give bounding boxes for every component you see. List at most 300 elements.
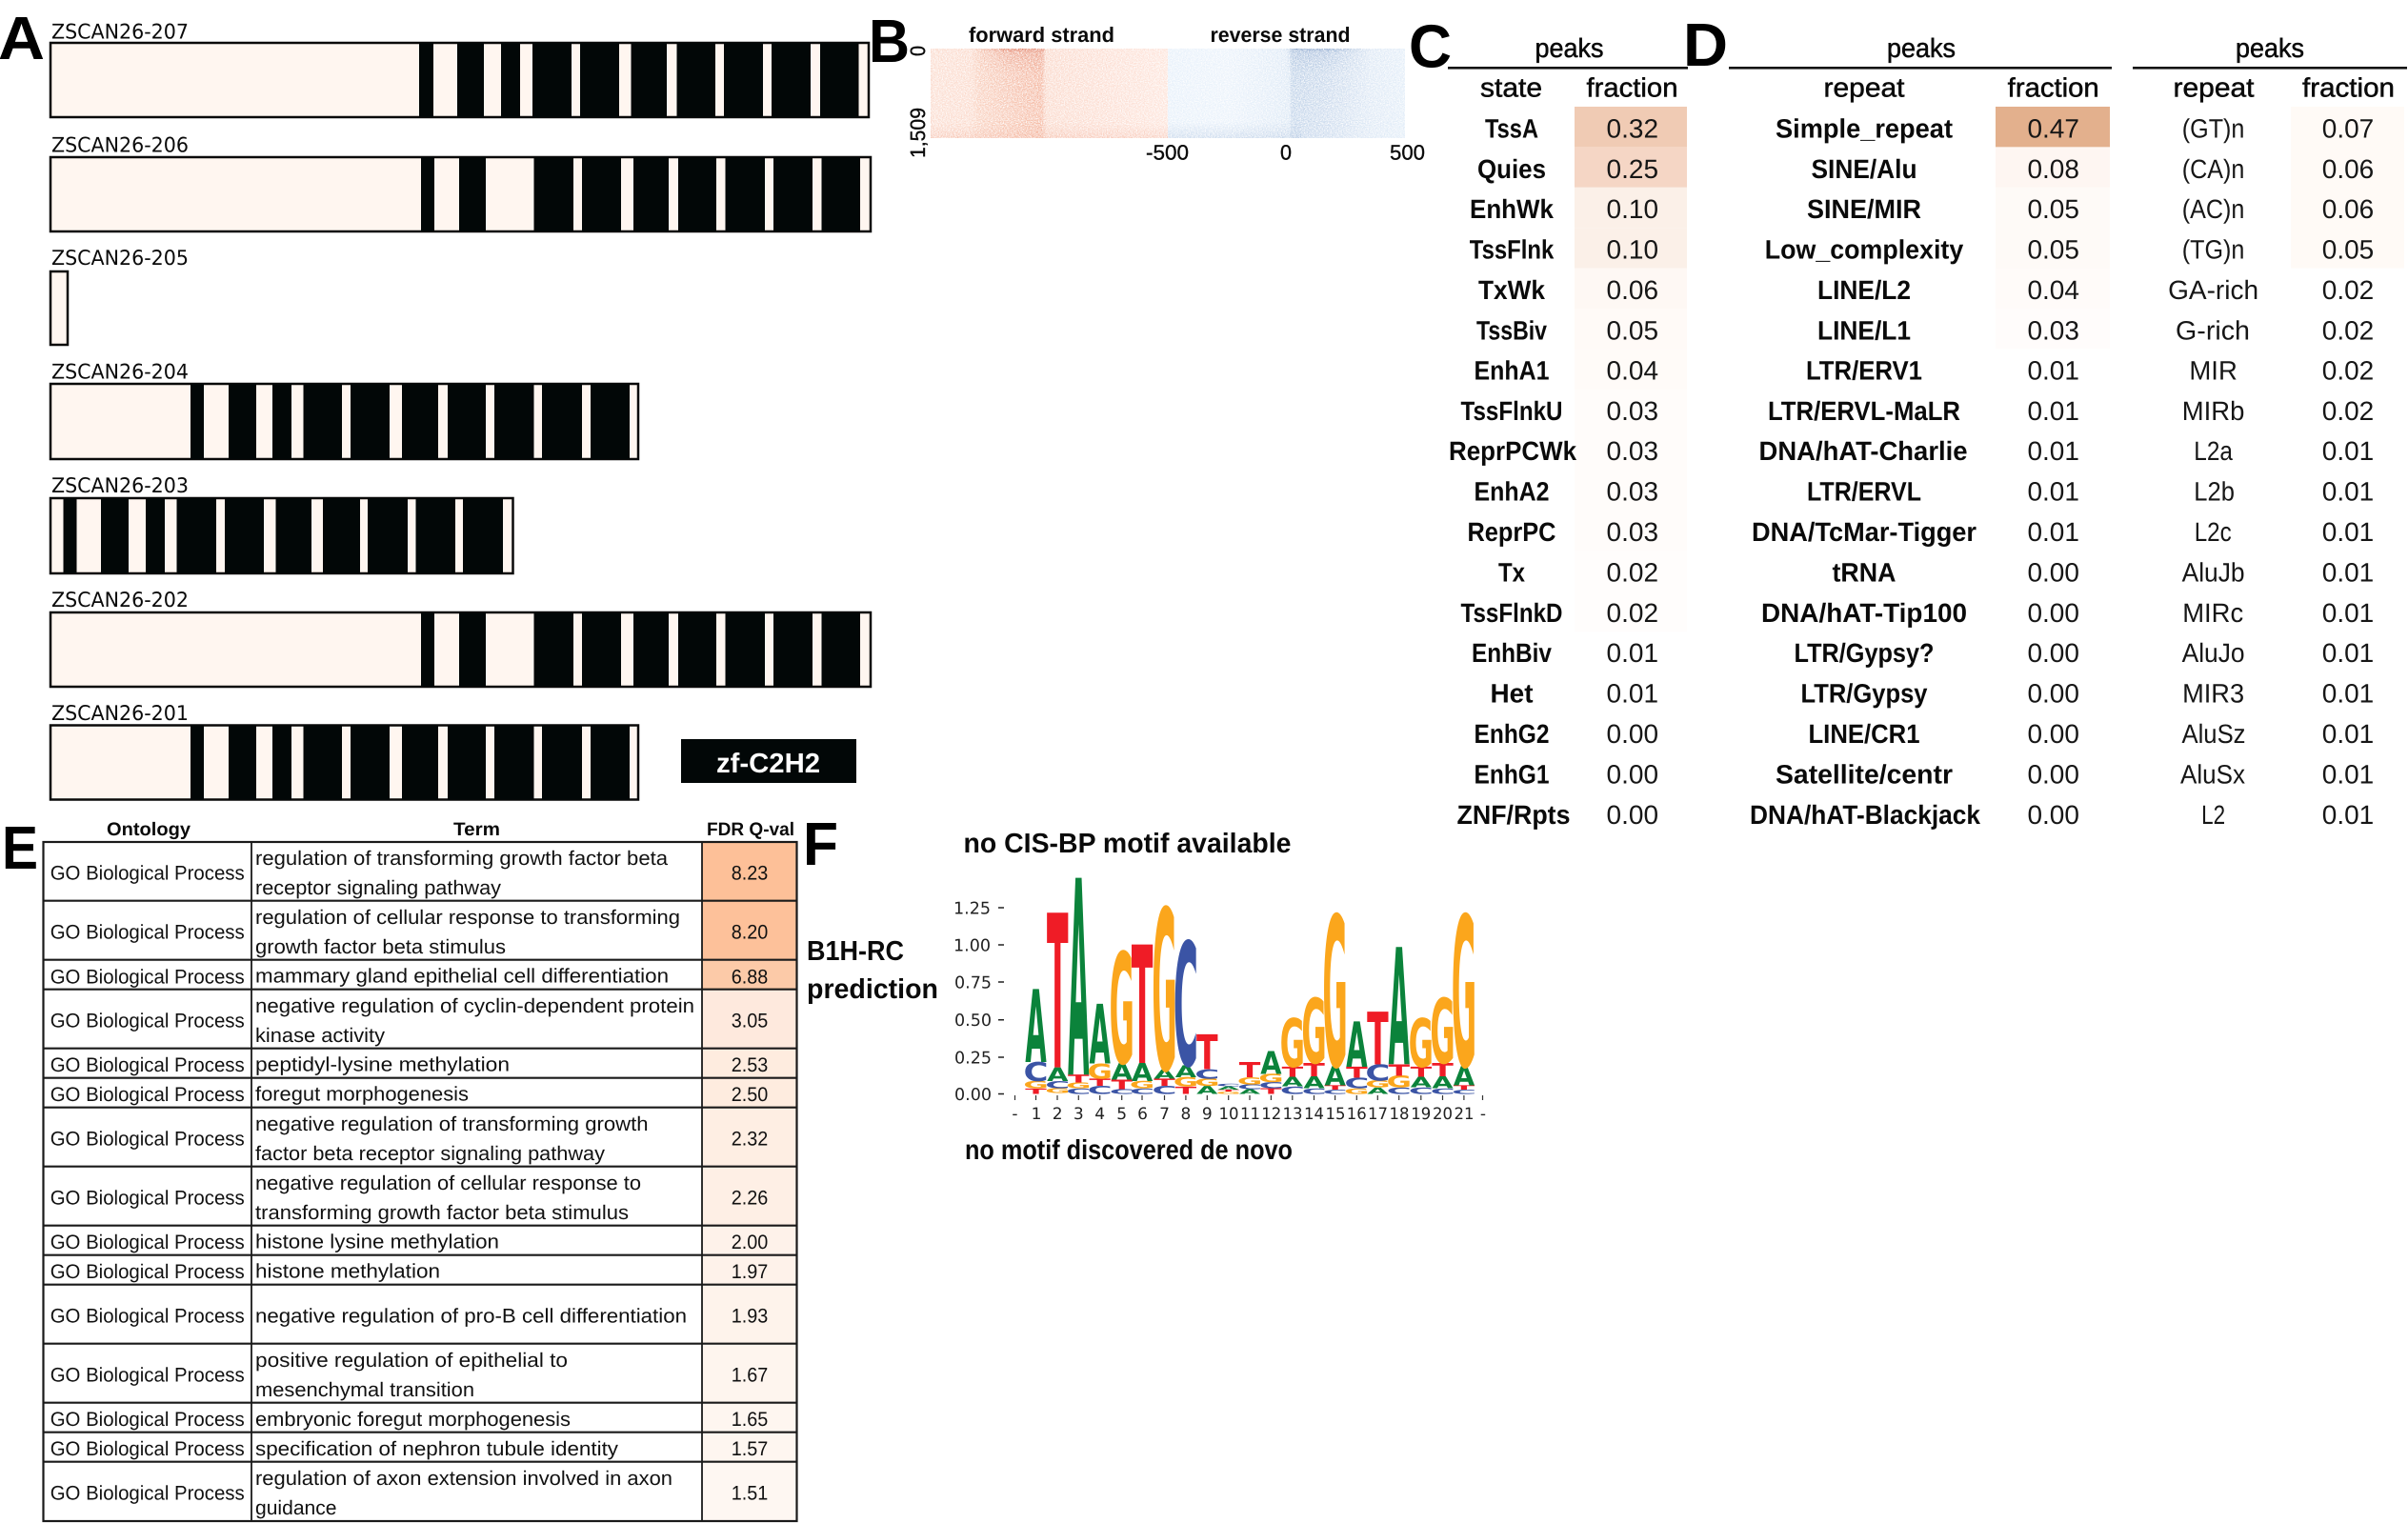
logo letter stacks: A [1025, 970, 1047, 1086]
logo letter stacks: T [1047, 872, 1069, 1118]
repeat class labels: LINE/L1 [1817, 315, 1911, 345]
panel letter E: E [2, 813, 38, 882]
logo letter stacks: A [1175, 1062, 1196, 1081]
panel C: chromatin state table [1409, 11, 1688, 830]
fraction values: repeat class: 0.00 [2027, 557, 2079, 587]
fraction values: repeat family: 0.06 [2322, 154, 2374, 184]
ontology column: GO Biological Process [50, 1409, 245, 1431]
repeat class labels: DNA/TcMar-Tigger [1752, 517, 1977, 547]
repeat class labels: tRNA [1833, 557, 1896, 587]
repeat class labels: LINE/L2 [1817, 275, 1911, 305]
repeat family labels: MIRb [2182, 396, 2244, 426]
fraction values: repeat family: 0.05 [2322, 235, 2374, 265]
ontology column: GO Biological Process [50, 1483, 245, 1505]
fraction values: 0.00 [1607, 759, 1658, 789]
repeat class labels: LTR/ERVL-MaLR [1768, 396, 1960, 426]
table header [107, 819, 794, 840]
isoform ZSCAN26-202 [50, 589, 871, 687]
fraction values: repeat family: 0.01 [2322, 436, 2374, 466]
repeat class labels: DNA/hAT-Blackjack [1750, 800, 1980, 830]
y axis labels: 1,509 [906, 108, 930, 158]
fraction values: repeat family: 0.02 [2322, 275, 2374, 305]
state labels: ZNF/Rpts [1457, 800, 1570, 830]
ontology column: GO Biological Process [50, 1232, 245, 1253]
logo x axis: 3 [1074, 1105, 1084, 1124]
fraction values: 0.06 [1607, 275, 1658, 305]
logo letter stacks: T [1432, 1059, 1454, 1081]
ontology column: GO Biological Process [50, 1054, 245, 1076]
logo letter stacks: G [1174, 1074, 1198, 1090]
logo letter stacks: A [1112, 1058, 1133, 1085]
isoform ZSCAN26-203 [50, 474, 512, 573]
table header: repeat class: repeat [1823, 72, 1905, 103]
logo letter stacks: T [1196, 1025, 1218, 1081]
fraction values: 0.01 [1607, 638, 1658, 668]
logo x axis: 13 [1282, 1105, 1303, 1124]
logo letter stacks: T [1154, 1076, 1175, 1089]
repeat family labels: AluSz [2181, 719, 2246, 749]
table header: Term [453, 819, 500, 840]
logo letter stacks: A [1068, 827, 1089, 1140]
fraction values: 0.03 [1607, 477, 1658, 507]
fraction values: repeat class: 0.01 [2027, 355, 2079, 385]
logo letter stacks: A [1090, 989, 1111, 1083]
repeat family labels: (GT)n [2182, 114, 2244, 143]
logo letter stacks: T [1239, 1058, 1260, 1082]
logo letter stacks: C [1323, 1089, 1348, 1095]
logo letter stacks: A [1454, 1061, 1475, 1092]
FDR Q-value column: 2.32 [732, 1129, 768, 1151]
repeat family labels: L2 [2201, 800, 2225, 830]
repeat family labels: AluJo [2182, 638, 2245, 668]
FDR Q-value column: 1.51 [732, 1483, 768, 1505]
term column [255, 848, 694, 1519]
logo letter stacks: T [1132, 913, 1153, 1102]
logo x axis: 5 [1116, 1105, 1127, 1124]
fraction values: repeat family: 0.01 [2322, 719, 2374, 749]
logo letter stacks: G [1066, 1081, 1091, 1091]
logo letter stacks: A [1154, 1067, 1175, 1081]
logo letter stacks: T [1324, 1084, 1346, 1092]
legend: zf-C2H2 domain [681, 739, 856, 783]
logo letter stacks: G [1194, 1076, 1219, 1089]
repeat family labels: GA-rich [2168, 275, 2258, 305]
ontology column: GO Biological Process [50, 966, 245, 989]
table header: FDR Q-val [707, 819, 794, 840]
repeat class labels: LTR/Gypsy [1800, 679, 1928, 709]
fraction values: 0.25 [1607, 154, 1658, 184]
term column: negative regulation of cellular response to [255, 1172, 641, 1194]
fraction heat cells: repeat family [2291, 107, 2404, 269]
repeat family labels: MIRc [2182, 598, 2243, 628]
logo letter stacks: T [1303, 1059, 1325, 1081]
logo letter stacks: G [1280, 1006, 1305, 1083]
repeat class labels: LINE/CR1 [1808, 719, 1920, 749]
term column: histone lysine methylation [255, 1231, 499, 1253]
state labels: ReprPC [1467, 517, 1556, 547]
fraction values: repeat family: 0.01 [2322, 477, 2374, 507]
logo y axis: 0.00 [954, 1086, 992, 1105]
term column: growth factor beta stimulus [255, 936, 506, 958]
panel F: motif logo and notes [803, 810, 1486, 1166]
state labels: EnhA1 [1475, 355, 1549, 385]
fraction values: 0.03 [1607, 436, 1658, 466]
heatmap: reverse strand in blue [1168, 49, 1405, 138]
repeat class table [1729, 33, 2112, 830]
fraction values: repeat class: 0.00 [2027, 719, 2079, 749]
repeat class labels: DNA/hAT-Charlie [1758, 436, 1968, 466]
heatmap: forward strand in red [931, 49, 1168, 138]
fraction values: repeat family: 0.01 [2322, 759, 2374, 789]
y axis labels [906, 46, 930, 158]
fraction values: 0.01 [1607, 679, 1658, 709]
logo letter stacks: C [1409, 1086, 1434, 1096]
logo x axis: 12 [1261, 1105, 1281, 1124]
logo letter stacks: A [1346, 1010, 1368, 1082]
panel E: GO enrichment table [2, 813, 797, 1521]
FDR Q-value column: 2.53 [732, 1054, 768, 1076]
repeat class labels: LTR/ERV1 [1806, 355, 1922, 385]
fraction values: 0.05 [1607, 315, 1658, 345]
isoform ZSCAN26-206 [50, 133, 871, 231]
isoform ZSCAN26-206: ZSCAN26-206 [51, 133, 189, 158]
repeat family labels: (CA)n [2182, 154, 2244, 184]
ontology column: GO Biological Process [50, 1129, 245, 1151]
x axis labels: 500 [1390, 141, 1425, 164]
isoform ZSCAN26-207 [50, 21, 869, 117]
fraction values: repeat family: 0.01 [2322, 800, 2374, 830]
FDR Q-value column: 3.05 [732, 1011, 768, 1032]
table header: repeat class: fraction [2008, 72, 2099, 103]
FDR Q-value column: 2.50 [732, 1084, 768, 1106]
heading: forward strand: forward strand [969, 23, 1114, 47]
logo letter stacks: T [1367, 998, 1389, 1082]
fraction values: 0.04 [1607, 355, 1658, 385]
logo letter stacks: G [1110, 923, 1134, 1099]
logo letter stacks: G [1087, 1060, 1113, 1083]
logo letter stacks: T [1260, 1087, 1282, 1095]
fraction values: repeat class: 0.00 [2027, 759, 2079, 789]
repeat family labels: AluJb [2182, 557, 2245, 587]
table header: Ontology [107, 819, 191, 840]
logo letter stacks: A [1196, 1084, 1217, 1096]
panel letter D: D [1683, 10, 1728, 79]
FDR Q-value column: 8.23 [732, 863, 768, 885]
logo letter stacks: T [1411, 1064, 1432, 1080]
term column: regulation of transforming growth factor beta [255, 848, 668, 870]
repeat family labels: L2c [2195, 517, 2232, 547]
repeat class labels: DNA/hAT-Tip100 [1761, 598, 1967, 628]
fraction values: repeat class: 0.01 [2027, 477, 2079, 507]
FDR Q-value column: 2.26 [732, 1188, 768, 1210]
fraction heat cells [1575, 107, 1687, 631]
logo x axis: 20 [1433, 1105, 1453, 1124]
logo letter stacks: C [1237, 1083, 1262, 1091]
logo letter stacks: A [1367, 1086, 1389, 1096]
state labels: ReprPCWk [1449, 436, 1576, 466]
logo x axis [1012, 1095, 1486, 1124]
logo letter stacks: C [1258, 1080, 1283, 1090]
logo letter stacks: C [1280, 1085, 1305, 1096]
isoform ZSCAN26-204 [50, 360, 638, 459]
state labels: TxWk [1478, 275, 1545, 305]
heading: reverse strand: reverse strand [1210, 23, 1351, 47]
fraction heat cells: repeat class [1996, 107, 2110, 349]
logo x axis: 17 [1368, 1105, 1388, 1124]
note: no motif discovered de novo: no motif discovered de novo [965, 1135, 1293, 1166]
logo letter stacks: G [1045, 1087, 1070, 1094]
logo letter stacks: C [1387, 1086, 1412, 1096]
fraction values: repeat class [2027, 114, 2079, 830]
logo letter stacks: C [1045, 1079, 1070, 1091]
repeat class labels [1750, 114, 1980, 830]
term column: peptidyl-lysine methylation [255, 1053, 510, 1076]
fraction values: repeat class: 0.00 [2027, 800, 2079, 830]
state labels: Het [1490, 679, 1534, 709]
repeat class labels: Satellite/centr [1776, 759, 1953, 789]
logo letter stacks: A [1132, 1058, 1153, 1087]
fraction values: repeat class: 0.01 [2027, 436, 2079, 466]
logo letter stacks: G [1322, 875, 1348, 1115]
state labels: EnhG2 [1475, 719, 1549, 749]
label: B1H-RC prediction: B1H-RC [807, 936, 904, 967]
fraction values: repeat family: 0.02 [2322, 355, 2374, 385]
term column: positive regulation of epithelial to [255, 1350, 568, 1372]
logo letter stacks: A [1239, 1088, 1260, 1095]
state labels: EnhWk [1470, 194, 1554, 224]
logo x axis: - [1480, 1105, 1486, 1124]
fraction values: repeat family: 0.02 [2322, 315, 2374, 345]
fraction values: 0.02 [1607, 557, 1658, 587]
fraction values: repeat family: 0.02 [2322, 396, 2374, 426]
term column: regulation of cellular response to transforming [255, 907, 680, 929]
fraction values: 0.32 [1607, 114, 1658, 143]
fraction values: repeat class: 0.01 [2027, 396, 2079, 426]
table header: repeat family: repeat [2174, 72, 2255, 103]
fraction values: repeat class: 0.00 [2027, 679, 2079, 709]
ontology column: GO Biological Process [50, 1084, 245, 1106]
term column: mesenchymal transition [255, 1379, 474, 1401]
label: B1H-RC prediction [807, 936, 938, 1005]
FDR Q-value column: 1.57 [732, 1438, 768, 1460]
table header: state [1480, 72, 1542, 103]
table header: fraction [1587, 72, 1678, 103]
logo y axis: 1.00 [953, 937, 991, 956]
fraction values: repeat class: 0.01 [2027, 517, 2079, 547]
sequence logo [953, 827, 1486, 1140]
note: no CIS-BP motif available: no CIS-BP motif available [964, 829, 1292, 859]
repeat class labels: Low_complexity [1765, 235, 1964, 265]
logo letter stacks: T [1346, 1064, 1368, 1081]
logo x axis: 21 [1454, 1105, 1475, 1124]
logo letter stacks: C [1024, 1057, 1049, 1088]
fraction values: repeat class: 0.04 [2027, 275, 2079, 305]
logo letter stacks: C [1452, 1089, 1476, 1095]
logo letter stacks: C [1365, 1060, 1390, 1086]
logo letter stacks: G [1387, 1072, 1412, 1092]
logo letter stacks: A [1432, 1073, 1454, 1092]
table header: repeat family: fraction [2302, 72, 2395, 103]
x axis labels: -500 [1146, 141, 1189, 164]
logo letter stacks: A [1324, 1061, 1346, 1092]
panel letter F: F [803, 810, 838, 878]
logo letter stacks: A [1282, 1074, 1303, 1090]
fraction values: repeat class: 0.00 [2027, 598, 2079, 628]
fraction values: repeat class: 0.05 [2027, 194, 2079, 224]
logo x axis: 4 [1094, 1105, 1105, 1124]
repeat class labels: SINE/MIR [1807, 194, 1921, 224]
FDR Q-value column [732, 863, 768, 1505]
label: B1H-RC prediction: prediction [807, 974, 938, 1005]
FDR Q-value heat cells [702, 842, 796, 1521]
term column: negative regulation of transforming growth [255, 1113, 648, 1135]
panel B: strand heatmap [873, 20, 1425, 160]
logo letter stacks: C [1194, 1067, 1219, 1081]
state labels: TssFlnk [1470, 235, 1555, 265]
logo y axis [953, 899, 1004, 1105]
logo x axis: 2 [1053, 1105, 1063, 1124]
logo letter stacks: T [1388, 1061, 1410, 1079]
logo letter stacks: G [1023, 1079, 1049, 1091]
logo letter stacks: G [1237, 1075, 1262, 1087]
ontology column: GO Biological Process [50, 1438, 245, 1460]
term column: regulation of axon extension involved in axon [255, 1468, 672, 1490]
repeat family labels: L2a [2194, 436, 2233, 466]
fraction values: 0.03 [1607, 517, 1658, 547]
term column: guidance [255, 1497, 337, 1519]
table header [1448, 33, 1688, 103]
logo x axis: 15 [1326, 1105, 1345, 1124]
isoform ZSCAN26-207: ZSCAN26-207 [51, 21, 189, 44]
repeat family labels: L2b [2194, 477, 2235, 507]
FDR Q-value column: 8.20 [732, 922, 768, 944]
table grid [43, 842, 797, 1521]
repeat family labels: AluSx [2180, 759, 2245, 789]
logo letter stacks: T [1068, 1072, 1090, 1085]
FDR Q-value column: 1.93 [732, 1306, 768, 1328]
fraction values: 0.03 [1607, 396, 1658, 426]
logo letter stacks: G [1452, 875, 1476, 1115]
logo letter stacks: A [1218, 1086, 1239, 1091]
logo letter stacks: T [1089, 1076, 1111, 1089]
fraction values [1607, 114, 1658, 830]
logo letter stacks: G [1258, 1072, 1284, 1085]
term column: mammary gland epithelial cell differentiation [255, 966, 669, 987]
logo letter stacks: C [1110, 1088, 1134, 1095]
ontology column: GO Biological Process [50, 1306, 245, 1328]
state labels: Quies [1477, 154, 1546, 184]
x axis labels [1146, 141, 1425, 164]
ontology column: GO Biological Process [50, 1261, 245, 1283]
state labels: TssFlnkD [1461, 598, 1562, 628]
repeat class labels: LTR/Gypsy? [1795, 638, 1934, 668]
FDR Q-value column: 1.65 [732, 1409, 768, 1431]
state labels: EnhA2 [1475, 477, 1549, 507]
fraction values: repeat family: 0.01 [2322, 679, 2374, 709]
logo x axis: 19 [1411, 1105, 1431, 1124]
repeat family labels: G-rich [2176, 315, 2250, 345]
logo letter stacks [1023, 827, 1476, 1140]
logo x axis: 8 [1180, 1105, 1191, 1124]
state labels: TssA [1485, 114, 1538, 143]
logo letter stacks: C [1431, 1087, 1455, 1095]
fraction values: repeat family: 0.01 [2322, 638, 2374, 668]
state labels: EnhBiv [1472, 638, 1552, 668]
logo x axis: - [1012, 1105, 1018, 1124]
logo letter stacks: G [1152, 866, 1177, 1123]
ontology column: GO Biological Process [50, 1365, 245, 1387]
logo letter stacks: A [1260, 1045, 1282, 1081]
fraction values: repeat class: 0.00 [2027, 638, 2079, 668]
logo letter stacks: G [1130, 1079, 1154, 1091]
repeat family labels: (AC)n [2182, 194, 2244, 224]
logo letter stacks: A [1047, 1064, 1068, 1086]
fraction values: repeat family: 0.06 [2322, 194, 2374, 224]
logo letter stacks: G [1365, 1078, 1391, 1090]
repeat class labels: Simple_repeat [1776, 114, 1953, 143]
logo letter stacks: C [1088, 1084, 1113, 1096]
isoform ZSCAN26-204: ZSCAN26-204 [51, 360, 189, 385]
repeat class labels: LTR/ERVL [1807, 477, 1921, 507]
FDR Q-value column: 1.97 [732, 1261, 768, 1283]
isoform ZSCAN26-202: ZSCAN26-202 [51, 589, 189, 612]
fraction values: repeat class: 0.03 [2027, 315, 2079, 345]
logo letter stacks: G [1344, 1087, 1370, 1095]
FDR Q-value column: 6.88 [732, 966, 768, 989]
fraction values: repeat class: 0.08 [2027, 154, 2079, 184]
fraction values: 0.10 [1607, 194, 1658, 224]
logo letter stacks: A [1411, 1074, 1432, 1091]
logo letter stacks: G [1430, 981, 1455, 1085]
ontology column [50, 863, 245, 1505]
ontology column: GO Biological Process [50, 1188, 245, 1210]
isoform ZSCAN26-205 [50, 247, 189, 345]
logo letter stacks: A [1303, 1073, 1325, 1092]
state labels: TssBiv [1476, 315, 1547, 345]
logo letter stacks: C [1066, 1087, 1091, 1095]
logo letter stacks: T [1454, 1084, 1475, 1092]
logo letter stacks: G [1409, 1006, 1434, 1083]
fraction values: repeat class: 0.05 [2027, 235, 2079, 265]
repeat family table [2133, 33, 2407, 830]
logo letter stacks: C [1216, 1083, 1241, 1088]
logo letter stacks: T [1111, 1077, 1133, 1092]
fraction values: 0.10 [1607, 235, 1658, 265]
fraction values: repeat family: 0.07 [2322, 114, 2374, 143]
table header: repeat family: peaks [2236, 33, 2304, 63]
term column: embryonic foregut morphogenesis [255, 1409, 571, 1431]
fraction values: 0.00 [1607, 800, 1658, 830]
logo letter stacks: C [1344, 1075, 1369, 1092]
state labels: EnhG1 [1475, 759, 1549, 789]
term column: histone methylation [255, 1261, 440, 1282]
repeat class labels: SINE/Alu [1812, 154, 1916, 184]
term column: receptor signaling pathway [255, 877, 502, 899]
repeat family labels: MIR [2189, 355, 2237, 385]
logo y axis: 1.25 [953, 899, 991, 918]
logo x axis: 7 [1159, 1105, 1170, 1124]
repeat family labels: (TG)n [2182, 235, 2244, 265]
logo x axis: 10 [1219, 1105, 1238, 1124]
term column: foregut morphogenesis [255, 1084, 469, 1105]
logo x axis: 9 [1202, 1105, 1213, 1124]
logo letter stacks: G [1216, 1091, 1241, 1094]
FDR Q-value column: 1.67 [732, 1365, 768, 1387]
ontology column: GO Biological Process [50, 863, 245, 885]
panel letter B: B [869, 7, 910, 75]
ontology column: GO Biological Process [50, 922, 245, 944]
logo letter stacks: C [1153, 1084, 1177, 1096]
